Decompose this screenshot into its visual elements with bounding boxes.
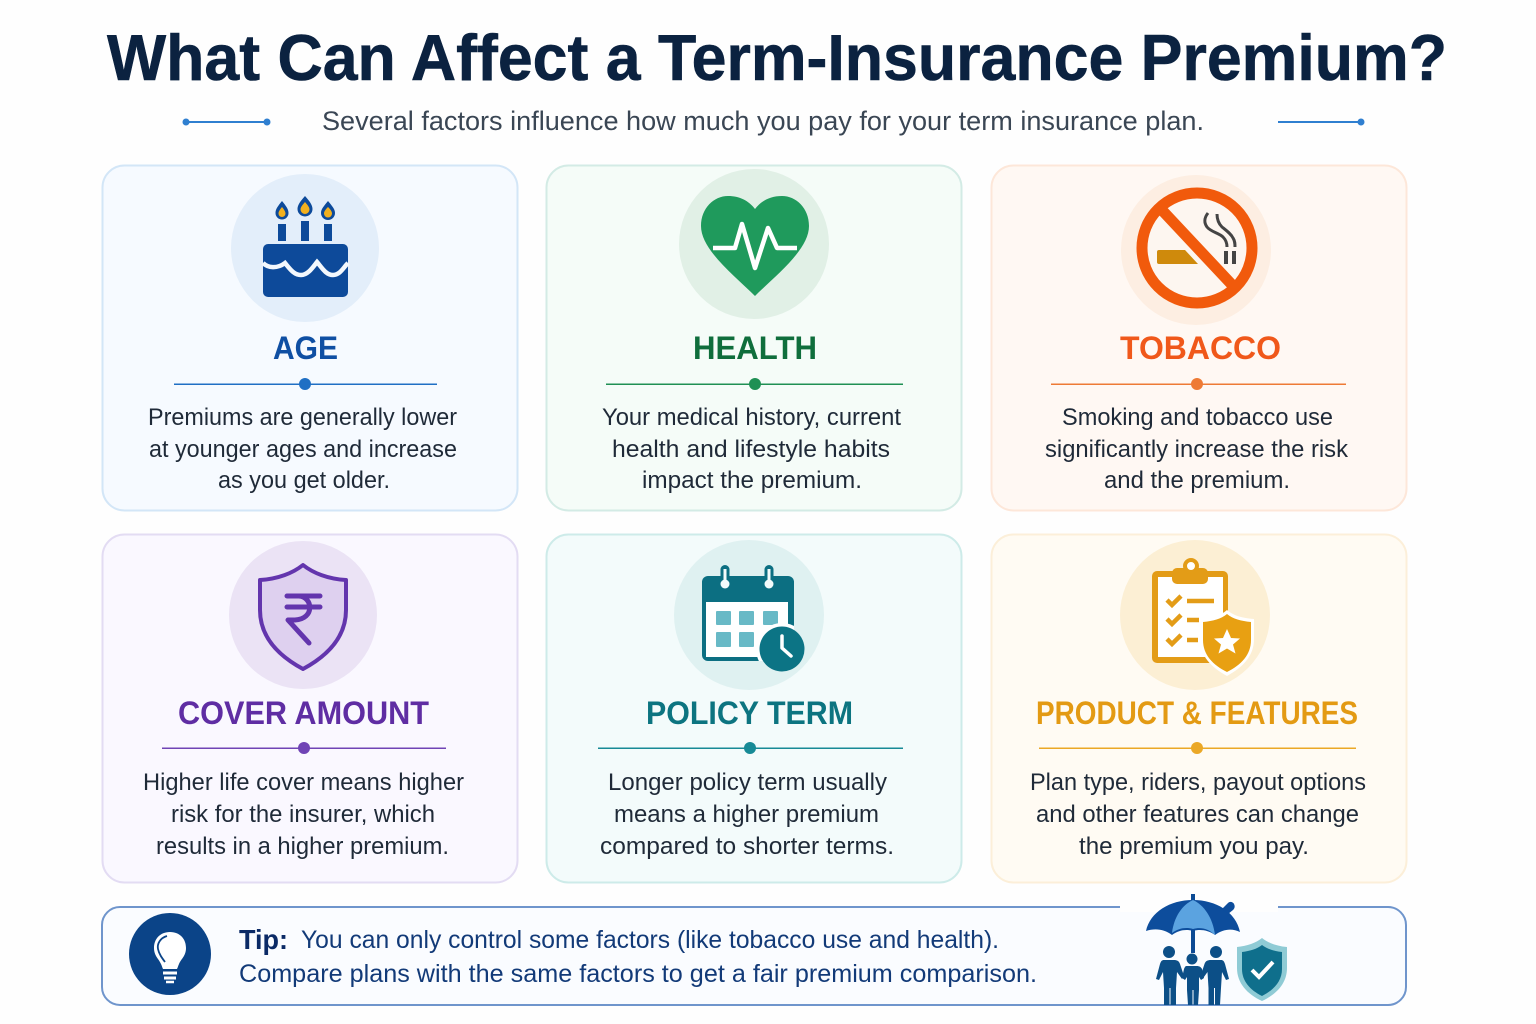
text: age description: at younger ages and increase [149, 436, 457, 463]
text: cover amount description: risk for the insurer, which [171, 801, 435, 828]
divider: policy term [598, 742, 903, 754]
heading: tobacco: TOBACCO [1120, 330, 1281, 366]
panel: tip [102, 894, 1406, 1005]
title: What Can Affect a Term-Insurance Premium? [107, 21, 1447, 94]
text: tobacco description: Smoking and tobacco use [1062, 404, 1333, 431]
text: cover amount description: Higher life cover means higher [143, 769, 464, 796]
icon: heart with pulse [679, 169, 829, 319]
heading: product and features: PRODUCT & FEATURES [1036, 695, 1358, 731]
icon: birthday cake [231, 174, 379, 322]
subtitle accent: right [1278, 118, 1364, 126]
text: age description: as you get older. [218, 467, 390, 494]
divider: product and features [1039, 742, 1356, 754]
divider: health [606, 378, 903, 390]
tip text: Compare plans with the same factors to get a fair premium comparison. [239, 960, 1037, 988]
text: policy term description: means a higher premium [614, 801, 879, 828]
text: health description: impact the premium. [642, 467, 862, 494]
text: product and features description: and other features can change [1036, 801, 1359, 828]
divider: cover amount [162, 742, 446, 754]
text: tobacco description: significantly increase the risk [1045, 436, 1349, 463]
tip text [239, 926, 1037, 988]
divider: tobacco [1051, 378, 1346, 390]
text: product and features description: Plan type, riders, payout options [1030, 769, 1366, 796]
icon: clipboard with shield [1120, 540, 1270, 690]
heading: cover amount: COVER AMOUNT [178, 695, 429, 731]
text: cover amount description: results in a higher premium. [156, 833, 449, 860]
heading: age: AGE [273, 330, 338, 366]
text: policy term description [600, 769, 894, 860]
icon: calendar with clock [674, 540, 824, 690]
heading: policy term: POLICY TERM [646, 695, 853, 731]
panel: product and features [992, 534, 1406, 882]
text: health description: health and lifestyle habits [612, 436, 890, 463]
icon: family under umbrella [1146, 894, 1287, 1005]
panel: tobacco [992, 166, 1406, 510]
text: age description [148, 404, 457, 494]
divider: age [174, 378, 437, 390]
text: policy term description: Longer policy term usually [608, 769, 887, 796]
text: cover amount description [143, 769, 464, 860]
icon: no smoking [1121, 175, 1271, 325]
tip text: You can only control some factors (like tobacco use and health). [301, 926, 999, 954]
panel: age [102, 166, 518, 510]
heading: health: HEALTH [693, 330, 817, 366]
panel: health [546, 166, 962, 510]
panel: cover amount [102, 534, 518, 882]
panel: policy term [546, 534, 962, 882]
text: product and features description: the premium you pay. [1079, 833, 1309, 860]
tip label: Tip: [239, 924, 288, 955]
text: health description [602, 404, 901, 494]
subtitle: Several factors influence how much you pay for your term insurance plan. [322, 106, 1204, 136]
text: age description: Premiums are generally lower [148, 404, 457, 431]
icon: rupee shield [229, 541, 377, 689]
icon: light bulb [129, 913, 211, 995]
text: tobacco description [1045, 404, 1349, 494]
text: policy term description: compared to shorter terms. [600, 833, 894, 860]
text: product and features description [1030, 769, 1366, 860]
text: tobacco description: and the premium. [1104, 467, 1290, 494]
subtitle accent: left [182, 118, 270, 126]
text: health description: Your medical history, current [602, 404, 901, 431]
